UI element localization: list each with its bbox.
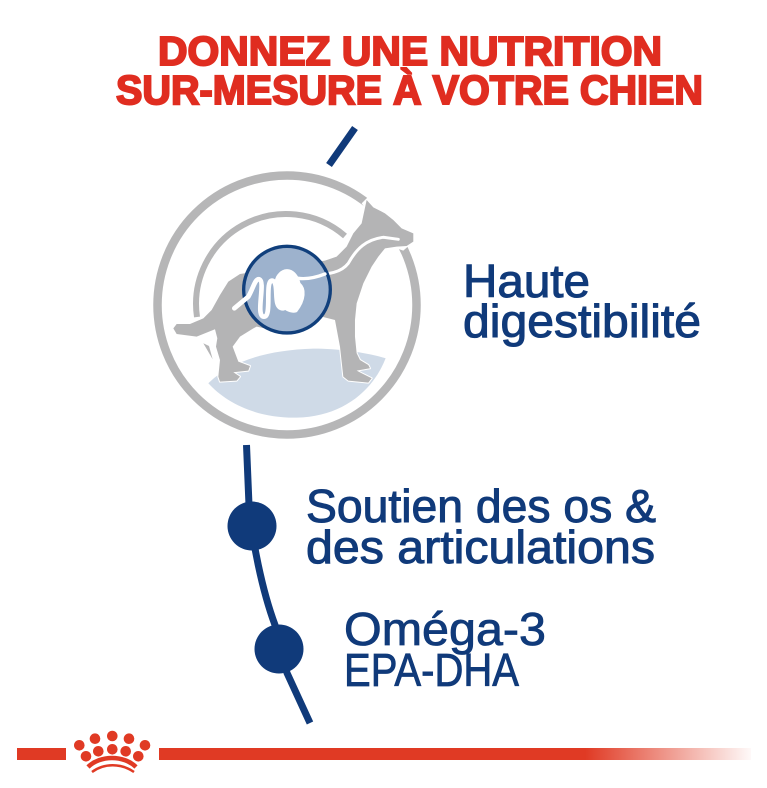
- label: Soutien des os & des articulations: Soutien des os &: [306, 480, 656, 532]
- inner arc: [196, 214, 345, 317]
- label: Haute digestibilité: digestibilité: [463, 295, 701, 347]
- timeline dot: bones and joints: [228, 502, 276, 550]
- ground shadow: [208, 349, 386, 418]
- icon: dog digestion: [158, 176, 427, 434]
- ring gap behind head: [362, 195, 427, 251]
- title: [116, 28, 703, 113]
- label: Oméga-3 EPA-DHA: EPA-DHA: [344, 644, 519, 696]
- dog silhouette: [173, 200, 413, 383]
- dog highlight: [307, 237, 398, 276]
- footer bar left: [17, 748, 66, 760]
- label: Haute digestibilité: [463, 255, 701, 347]
- intestine: [234, 270, 325, 317]
- timeline segment: top: [329, 128, 355, 165]
- inner arc tail sliver: [203, 343, 213, 359]
- label: Haute digestibilité: Haute: [463, 255, 590, 307]
- outer ring: [158, 176, 416, 434]
- title: DONNEZ UNE NUTRITION: [158, 28, 662, 74]
- icon: crown logo: [74, 731, 150, 772]
- label: Soutien des os & des articulations: [306, 480, 656, 573]
- label: Oméga-3 EPA-DHA: Oméga-3: [344, 603, 546, 655]
- timeline curve: [246, 445, 310, 723]
- title: SUR-MESURE À VOTRE CHIEN: [116, 67, 703, 113]
- footer bar right: [159, 748, 751, 760]
- magnifier: [244, 246, 330, 333]
- timeline dot: omega-3: [254, 624, 304, 674]
- label: Oméga-3 EPA-DHA: [344, 603, 546, 696]
- label: Soutien des os & des articulations: des articulations: [306, 521, 655, 573]
